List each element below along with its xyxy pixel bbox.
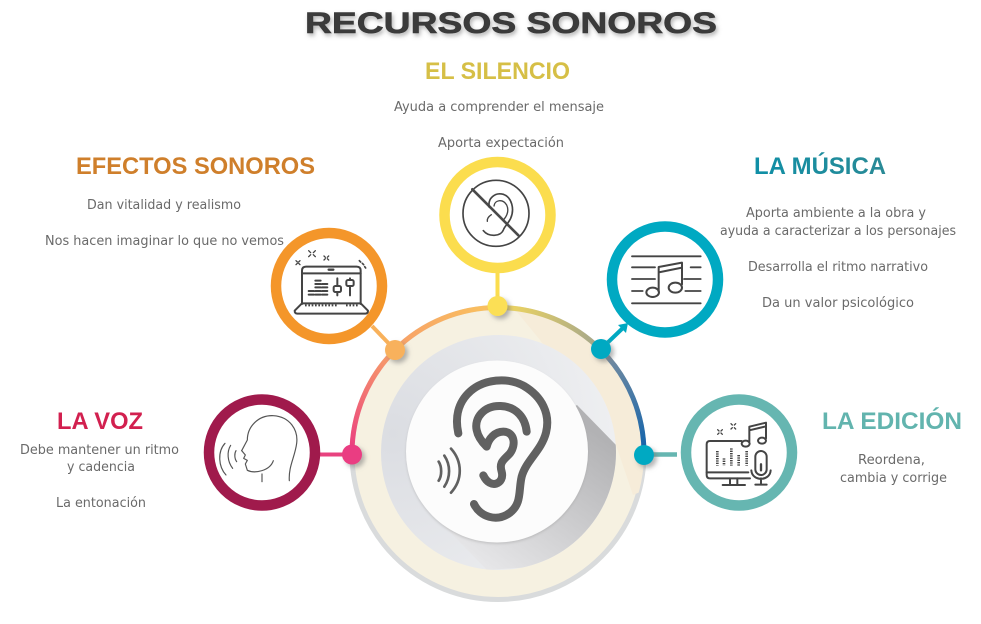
node: el silencio <box>488 296 508 316</box>
text: efectos sonoros <box>45 198 284 249</box>
connector: la música <box>601 323 628 349</box>
node: la música <box>591 339 611 359</box>
gray disc <box>381 335 616 570</box>
node: la edición <box>634 445 654 465</box>
icon: crossed ear <box>444 162 550 268</box>
text: el silencio: Aporta expectación <box>438 136 564 151</box>
node: la voz <box>342 444 362 464</box>
text: el silencio: Ayuda a comprender el mensaje <box>394 100 604 115</box>
text: la música: ayuda a caracterizar a los personajes <box>720 224 956 239</box>
text: la música: Aporta ambiente a la obra y <box>746 206 926 221</box>
text: la edición: cambia y corrige <box>840 471 947 486</box>
icon: music staff <box>612 226 718 332</box>
text: efectos sonoros: Nos hacen imaginar lo que no vemos <box>45 234 284 249</box>
panel: la voz <box>20 400 315 511</box>
colored arc <box>352 308 644 454</box>
text: la música: Desarrolla el ritmo narrativo <box>748 260 928 275</box>
text: la edición: Reordena, <box>858 453 925 468</box>
panel: el silencio <box>394 58 604 268</box>
text: la voz: La entonación <box>56 496 146 511</box>
ring long shadow <box>520 312 644 494</box>
panel: la música <box>612 152 956 332</box>
connector: la edición <box>644 452 677 457</box>
text: la música <box>720 206 956 311</box>
heading: la voz: LA VOZ <box>57 408 143 435</box>
text: la voz: y cadencia <box>67 460 135 475</box>
icon: studio computer and microphone <box>686 400 792 506</box>
text: la voz: Debe mantener un ritmo <box>20 443 179 458</box>
text: la voz <box>20 443 179 511</box>
text: el silencio <box>394 100 604 151</box>
title: RECURSOS SONOROS <box>305 7 717 40</box>
node: efectos sonoros <box>385 340 405 360</box>
icon: ear <box>439 380 547 518</box>
icon: speaking head <box>209 400 315 506</box>
panel: efectos sonoros <box>45 153 382 339</box>
connector: la voz <box>318 452 352 456</box>
connector: el silencio <box>496 273 500 306</box>
text: la edición <box>840 453 947 486</box>
outer ring base <box>352 308 644 600</box>
white disc <box>406 360 588 542</box>
panel: la edición <box>686 400 962 506</box>
text: efectos sonoros: Dan vitalidad y realismo <box>87 198 241 213</box>
long shadow of white disc <box>482 405 616 568</box>
text: la música: Da un valor psicológico <box>762 296 914 311</box>
heading: la edición: LA EDICIÓN <box>822 407 962 435</box>
heading: la música: LA MÚSICA <box>754 152 886 180</box>
icon: laptop mixer <box>276 233 382 339</box>
connector: efectos sonoros <box>372 326 395 350</box>
heading: el silencio: EL SILENCIO <box>425 58 570 85</box>
heading: efectos sonoros: EFECTOS SONOROS <box>76 153 315 180</box>
central diagram <box>352 300 660 600</box>
